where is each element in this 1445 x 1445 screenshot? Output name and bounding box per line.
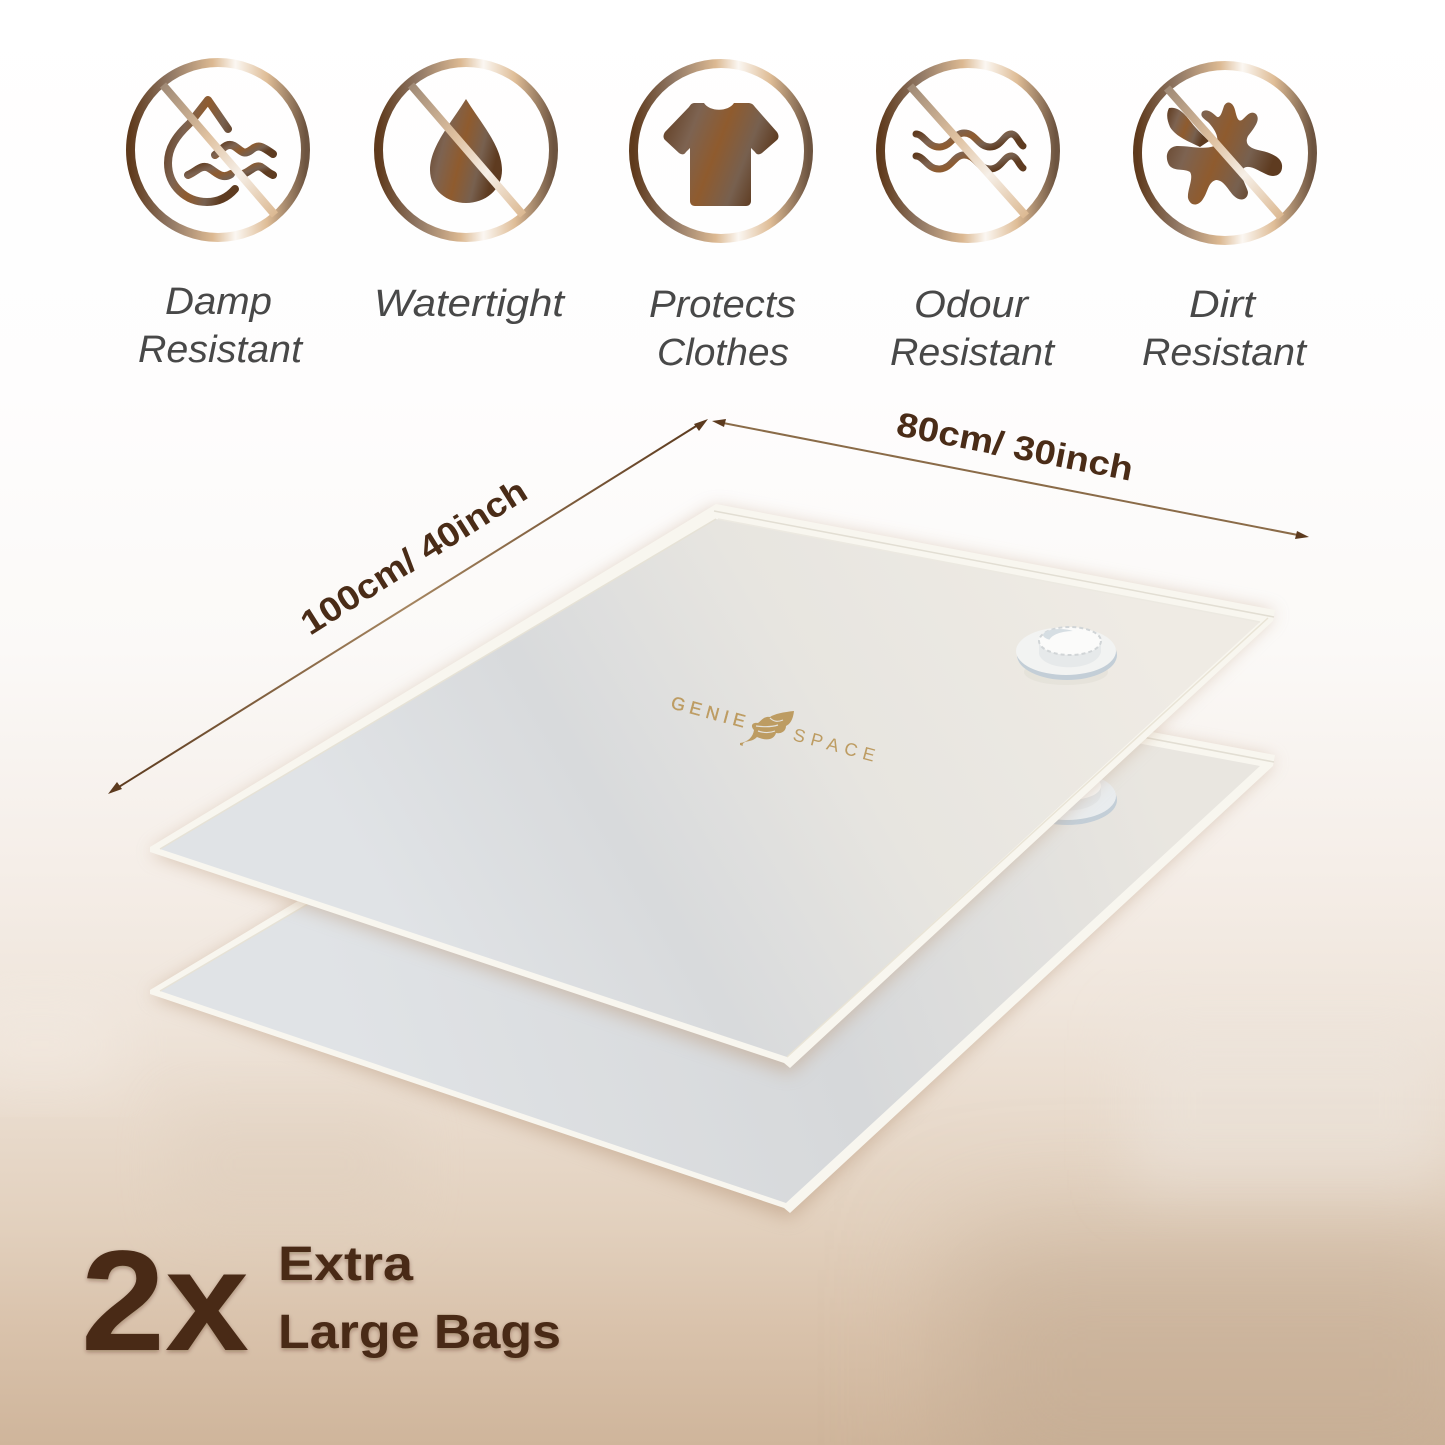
icon: odour resistant bbox=[880, 64, 1056, 238]
label: damp resistant: Resistant bbox=[138, 329, 303, 371]
feature labels bbox=[138, 281, 1307, 374]
label: protects clothes: Protects bbox=[649, 284, 796, 326]
lower vacuum bag bbox=[150, 650, 1275, 1218]
label: damp resistant: Damp bbox=[165, 281, 272, 323]
dimension arrow: 80cm bbox=[712, 419, 1309, 539]
label: protects clothes bbox=[649, 284, 796, 374]
dimension label: 80cm / 30inch: 80cm/ 30inch bbox=[893, 406, 1136, 489]
label: watertight: Watertight bbox=[374, 283, 566, 325]
quantity callout bbox=[81, 1222, 561, 1381]
label: dirt resistant bbox=[1142, 284, 1307, 374]
label: odour resistant: Odour bbox=[914, 284, 1029, 326]
label: protects clothes: Clothes bbox=[657, 332, 789, 374]
quantity text: Extra bbox=[278, 1238, 413, 1291]
label: odour resistant bbox=[890, 284, 1055, 374]
logo mark bbox=[740, 711, 794, 746]
icon: protects clothes bbox=[634, 64, 808, 238]
icon: watertight bbox=[378, 62, 554, 238]
quantity text: Large Bags bbox=[278, 1306, 561, 1359]
valve cap bbox=[1016, 627, 1117, 685]
brand logo bbox=[669, 693, 877, 766]
label: odour resistant: Resistant bbox=[890, 332, 1055, 374]
brand logo: GENIE bbox=[669, 693, 748, 732]
label: damp resistant bbox=[138, 281, 303, 371]
icon: damp resistant bbox=[130, 62, 306, 238]
label: dirt resistant: Resistant bbox=[1142, 332, 1307, 374]
dimension arrow: 100cm bbox=[108, 419, 708, 794]
big quantity: 2x bbox=[81, 1222, 249, 1381]
upper vacuum bag bbox=[150, 504, 1275, 1073]
dimension label: 100cm / 40inch: 100cm/ 40inch bbox=[294, 472, 534, 643]
quantity text bbox=[278, 1238, 561, 1359]
lower bag valve bbox=[1017, 772, 1117, 825]
brand logo: SPACE bbox=[791, 725, 877, 766]
icon: dirt resistant bbox=[1138, 66, 1312, 240]
label: dirt resistant: Dirt bbox=[1189, 284, 1257, 326]
